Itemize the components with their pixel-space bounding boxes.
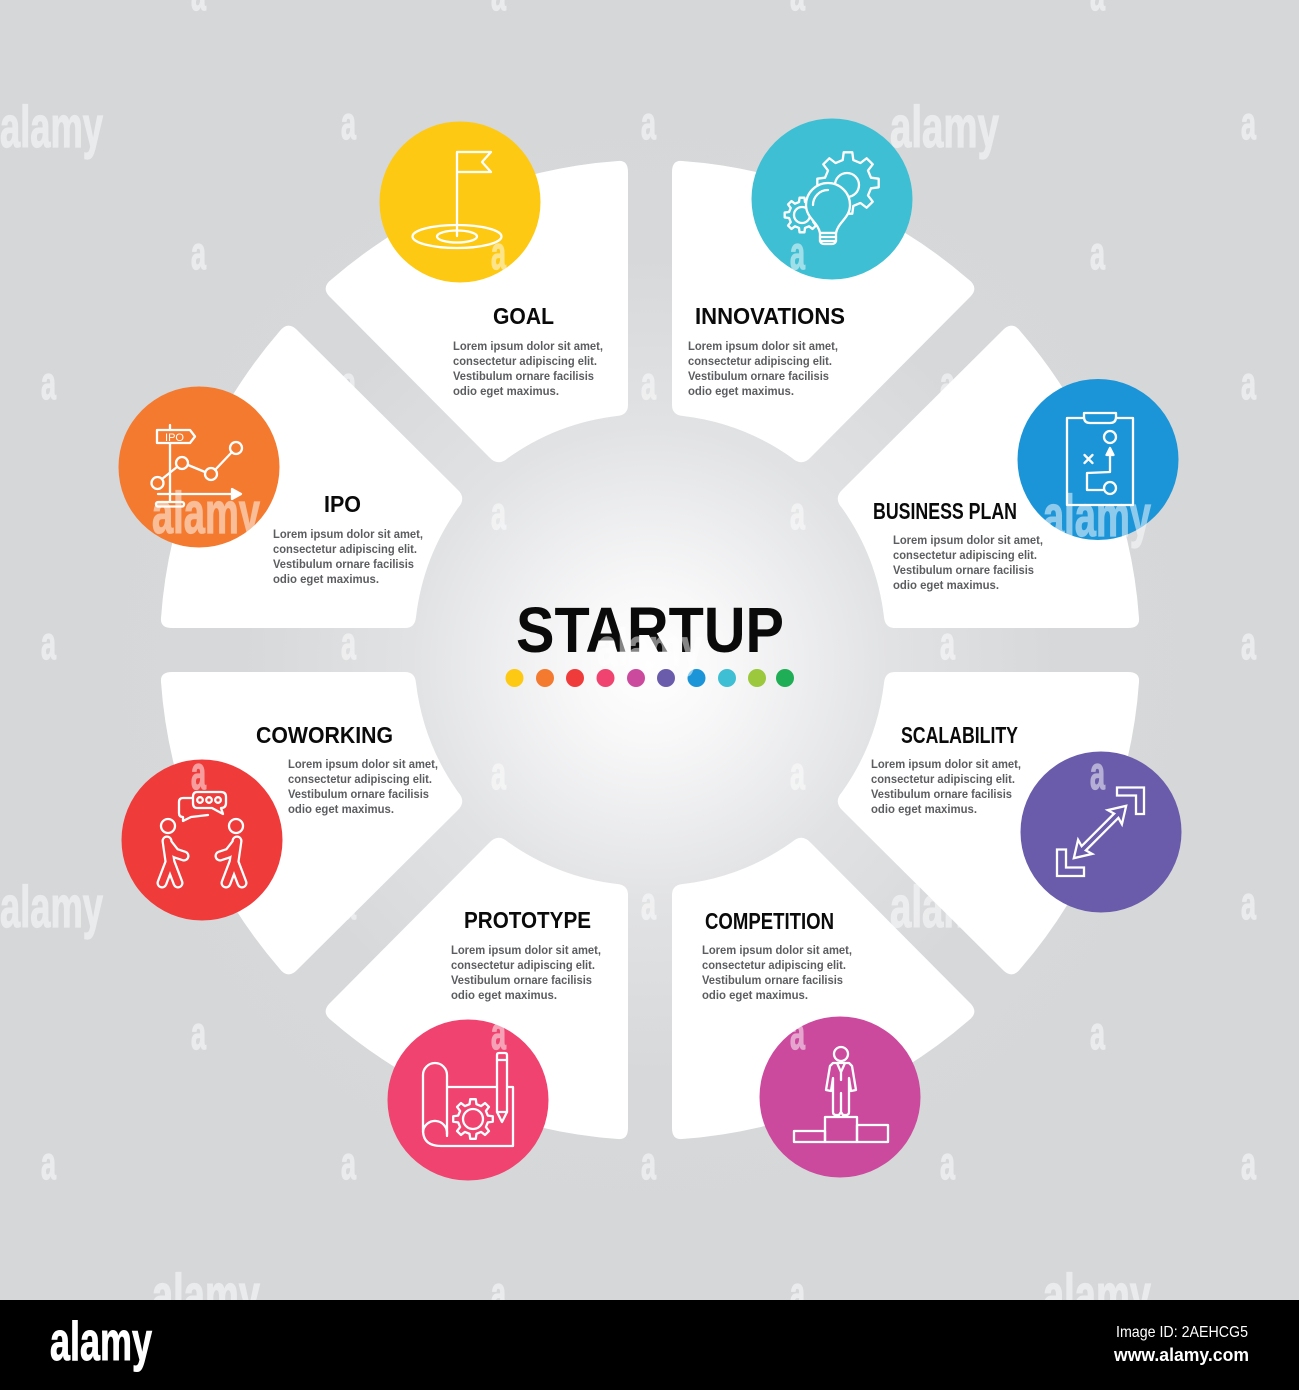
text block: prototype [451, 943, 601, 1002]
watermarks: a [1241, 877, 1256, 929]
watermarks: a [491, 1267, 506, 1319]
watermarks: a [1241, 617, 1256, 669]
watermarks: a [790, 747, 805, 799]
watermarks: alamy [1043, 484, 1151, 549]
text block: business plan: odio eget maximus. [893, 578, 999, 592]
watermarks: alamy [890, 875, 999, 940]
icon: ipo chart with signpost [152, 425, 242, 506]
text block: competition: odio eget maximus. [702, 988, 808, 1002]
panel: ipo [118, 326, 462, 628]
watermarks: a [341, 877, 356, 929]
watermarks: a [1090, 747, 1105, 799]
watermarks: a [790, 1007, 805, 1059]
heading: business plan: BUSINESS PLAN [873, 498, 1017, 524]
text block: business plan: Lorem ipsum dolor sit amet, [893, 533, 1043, 547]
text block: competition: Vestibulum ornare facilisis [702, 973, 843, 987]
panel: scalability [838, 672, 1182, 974]
watermarks: a [1241, 97, 1256, 149]
watermarks: a [790, 227, 805, 279]
panel: goal [326, 122, 628, 462]
text block: innovations: consectetur adipiscing elit. [688, 354, 832, 368]
panel: innovations [672, 118, 974, 462]
watermarks: a [491, 227, 506, 279]
icon: person on podium [794, 1047, 888, 1142]
text block: coworking: odio eget maximus. [288, 802, 394, 816]
text block: ipo: Lorem ipsum dolor sit amet, [273, 527, 423, 541]
watermarks: a [940, 357, 955, 409]
heading: coworking: COWORKING [256, 722, 393, 748]
watermarks: a [341, 357, 356, 409]
watermarks: alamy [890, 95, 999, 160]
panel: coworking [122, 672, 462, 974]
watermarks: alamy [597, 619, 702, 677]
heading: competition: COMPETITION [705, 908, 834, 934]
text block: ipo [273, 527, 423, 586]
watermarks: a [790, 487, 805, 539]
footer logo: alamy [50, 1310, 152, 1372]
heading: innovations: INNOVATIONS [695, 303, 845, 329]
footer bar [0, 1300, 1299, 1390]
text block: innovations: Vestibulum ornare facilisis [688, 369, 829, 383]
colour dots [506, 669, 794, 687]
icon: clipboard plan [1067, 413, 1133, 505]
text block: goal: odio eget maximus. [453, 384, 559, 398]
text block: business plan: consectetur adipiscing elit. [893, 548, 1037, 562]
watermarks: a [491, 1007, 506, 1059]
text block: ipo: Vestibulum ornare facilisis [273, 557, 414, 571]
icon: blueprint with gear and pencil [423, 1053, 513, 1146]
text block: scalability [871, 757, 1021, 816]
heading: ipo: IPO [324, 491, 361, 517]
text block: scalability: Lorem ipsum dolor sit amet, [871, 757, 1021, 771]
watermarks: a [41, 1137, 56, 1189]
watermarks: a [191, 747, 206, 799]
text block: innovations: Lorem ipsum dolor sit amet, [688, 339, 838, 353]
title: STARTUP [516, 594, 784, 666]
text block: coworking [288, 757, 438, 816]
watermarks: alamy [0, 95, 103, 160]
text block: goal: Lorem ipsum dolor sit amet, [453, 339, 603, 353]
watermarks: alamy [0, 875, 103, 940]
watermarks: alamy [152, 481, 260, 546]
watermarks: a [641, 1137, 656, 1189]
text block: business plan [893, 533, 1043, 592]
watermarks: a [1241, 1137, 1256, 1189]
text block: competition: Lorem ipsum dolor sit amet, [702, 943, 852, 957]
watermarks: a [1090, 1007, 1105, 1059]
watermarks: a [1090, 227, 1105, 279]
text block: coworking: consectetur adipiscing elit. [288, 772, 432, 786]
watermarks: a [940, 617, 955, 669]
panel: competition [672, 838, 974, 1178]
text block: prototype: Lorem ipsum dolor sit amet, [451, 943, 601, 957]
heading: goal: GOAL [493, 303, 554, 329]
text block: innovations: odio eget maximus. [688, 384, 794, 398]
text block: scalability: consectetur adipiscing elit. [871, 772, 1015, 786]
watermarks: a [341, 617, 356, 669]
watermarks: a [790, 1267, 805, 1319]
text block: business plan: Vestibulum ornare facilisis [893, 563, 1034, 577]
text block: scalability: Vestibulum ornare facilisis [871, 787, 1012, 801]
text block: goal [453, 339, 603, 398]
icon: two people talking [161, 792, 243, 883]
watermarks: a [491, 747, 506, 799]
watermarks: alamy [152, 1263, 260, 1328]
icon: light bulb and gears [785, 152, 879, 244]
watermarks: a [641, 877, 656, 929]
watermarks: a [341, 97, 356, 149]
text block: goal: Vestibulum ornare facilisis [453, 369, 594, 383]
text block: scalability: odio eget maximus. [871, 802, 977, 816]
watermarks: a [491, 487, 506, 539]
text block: competition: consectetur adipiscing elit. [702, 958, 846, 972]
text block: goal: consectetur adipiscing elit. [453, 354, 597, 368]
watermarks: a [41, 357, 56, 409]
watermarks: a [191, 227, 206, 279]
icon: flag on target [412, 152, 502, 248]
text block: coworking: Vestibulum ornare facilisis [288, 787, 429, 801]
text block: innovations [688, 339, 838, 398]
watermarks: a [641, 357, 656, 409]
heading: scalability: SCALABILITY [901, 722, 1018, 748]
panel: prototype [326, 838, 628, 1180]
heading: prototype: PROTOTYPE [464, 907, 591, 933]
watermarks: a [641, 97, 656, 149]
text block: competition [702, 943, 852, 1002]
website: www.alamy.com [1113, 1345, 1249, 1365]
image id: Image ID: 2AEHCG5 [1116, 1324, 1248, 1341]
watermarks: a [41, 617, 56, 669]
watermarks: a [1241, 357, 1256, 409]
icon label: ipo sign: IPO [165, 432, 184, 444]
watermarks: alamy [1043, 1263, 1151, 1328]
text block: coworking: Lorem ipsum dolor sit amet, [288, 757, 438, 771]
text block: prototype: Vestibulum ornare facilisis [451, 973, 592, 987]
text block: prototype: consectetur adipiscing elit. [451, 958, 595, 972]
panel: business plan [838, 326, 1178, 628]
text block: ipo: consectetur adipiscing elit. [273, 542, 417, 556]
watermarks: a [191, 1007, 206, 1059]
icon: scale arrows [1057, 788, 1144, 876]
text block: ipo: odio eget maximus. [273, 572, 379, 586]
watermarks: a [341, 1137, 356, 1189]
watermarks: a [940, 1137, 955, 1189]
text block: prototype: odio eget maximus. [451, 988, 557, 1002]
